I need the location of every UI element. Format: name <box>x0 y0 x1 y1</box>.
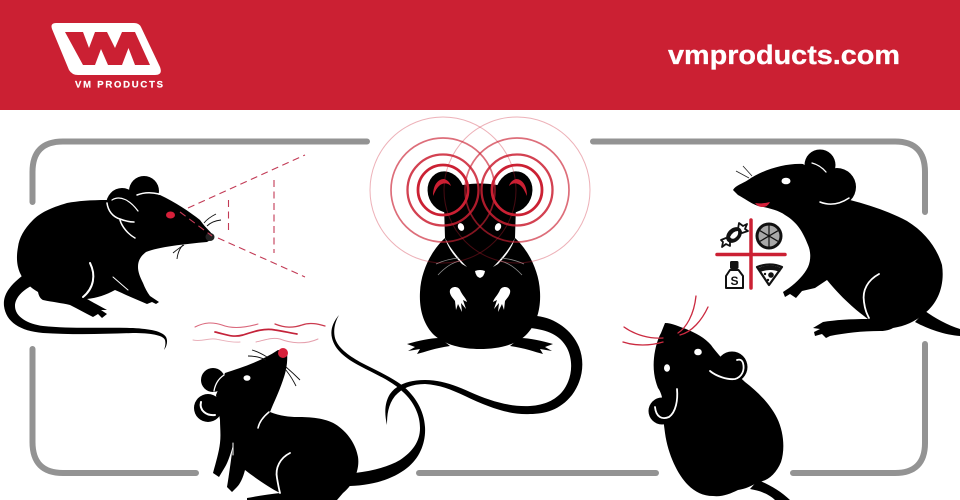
header banner <box>0 0 960 110</box>
icon: pizza slice <box>757 264 782 285</box>
touch rat tail <box>750 480 790 500</box>
smell rat nose <box>278 348 288 358</box>
smell rat body <box>213 350 358 500</box>
smell rat whiskers <box>248 350 300 386</box>
sight rat body <box>17 195 214 318</box>
mouse: hearing <box>385 166 582 425</box>
sight rat highlights <box>83 193 159 297</box>
touch rat right ear <box>716 352 748 382</box>
taste rat highlights <box>812 163 879 318</box>
smell rat eye <box>244 375 250 381</box>
taste rat eye <box>782 178 790 184</box>
right ear inner arc <box>509 179 527 196</box>
icon: salt shaker: S <box>730 274 739 288</box>
hearing mouse tail <box>385 316 582 425</box>
hearing mouse left ear <box>421 166 471 218</box>
smell rat highlights <box>201 375 290 493</box>
food icons <box>717 220 785 288</box>
frame brackets <box>32 142 925 473</box>
touch rat red whiskers <box>623 296 708 345</box>
hearing mouse right ear <box>489 166 539 218</box>
rat: touch <box>623 296 790 500</box>
taste rat mouth <box>755 202 770 207</box>
sight rat eye <box>166 212 175 218</box>
sound rings: right ear <box>444 117 590 263</box>
taste rat back ear <box>804 150 836 180</box>
sight rat whiskers <box>173 214 221 259</box>
touch rat left ear <box>648 398 676 424</box>
icon: citrus slice <box>756 222 782 250</box>
hearing mouse right foot <box>510 338 553 354</box>
sight rat nose <box>206 233 214 241</box>
rat: taste <box>733 150 960 338</box>
smell rat back ear <box>201 368 225 392</box>
sight rat front ear <box>106 188 138 222</box>
touch rat eyes <box>694 349 702 355</box>
sight rat tail <box>4 276 167 350</box>
smell rat tail <box>331 315 425 486</box>
website address: vmproducts.com <box>668 40 900 70</box>
taste rat body <box>733 164 943 338</box>
icon: candy <box>721 223 748 247</box>
hearing mouse left foot <box>407 338 450 354</box>
smell rat front ear <box>194 394 222 422</box>
rat: sight <box>4 176 221 350</box>
touch rat body <box>654 323 783 496</box>
logo: VM Products: VM PRODUCTS <box>75 80 163 90</box>
taste rat tail <box>915 311 960 336</box>
sound rings: left ear <box>370 117 516 263</box>
sight cone dashes <box>180 155 305 277</box>
left ear inner arc <box>433 179 451 196</box>
hearing mouse white details <box>436 222 524 312</box>
smell waves <box>193 323 325 343</box>
red cross divider <box>717 220 785 288</box>
logo: VM Products <box>52 23 163 90</box>
touch rat highlights <box>655 360 744 418</box>
hearing mouse body <box>420 184 540 349</box>
taste rat front ear <box>818 168 856 206</box>
sight rat back ear <box>129 176 159 206</box>
rat: smell <box>194 315 425 500</box>
taste rat whiskers <box>736 166 752 178</box>
